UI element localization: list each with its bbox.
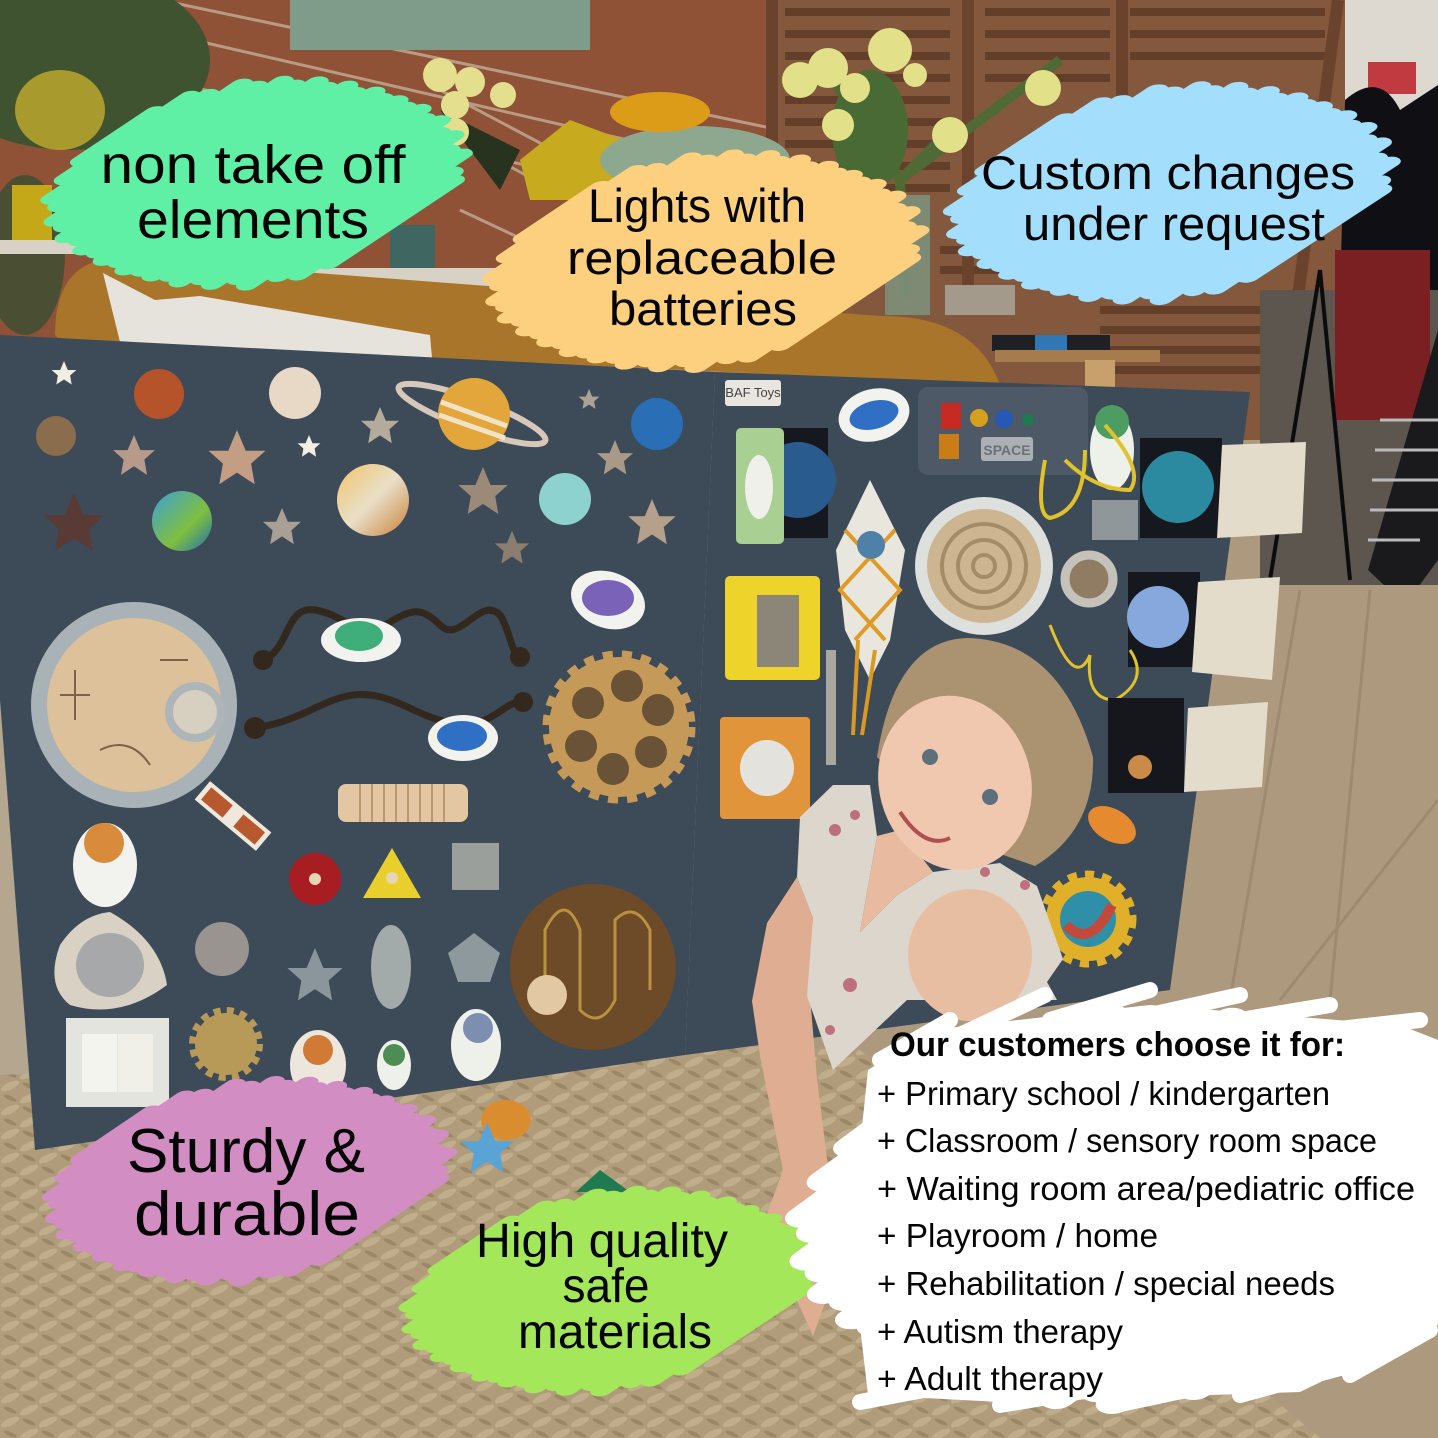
callout: lights with replaceable batteries: batteries <box>609 282 797 335</box>
callout: high quality safe materials <box>326 1127 888 1438</box>
right activity board <box>685 372 1306 1055</box>
brand tag: BAF Toys <box>725 385 781 400</box>
galaxy gear <box>1044 875 1132 963</box>
saturn door <box>1108 698 1268 793</box>
list items: + Primary school / kindergarten <box>877 1075 1330 1112</box>
light switch <box>66 1018 169 1107</box>
list heading: Our customers choose it for: <box>890 1026 1345 1064</box>
door with earth window <box>736 428 836 544</box>
neck and chest <box>860 830 933 932</box>
rocket lacing <box>836 480 905 735</box>
wavy cut slots <box>255 610 523 728</box>
list items: + Classroom / sensory room space <box>877 1122 1377 1159</box>
dress flowers <box>825 810 1030 1035</box>
orange door <box>720 717 810 819</box>
dress <box>797 785 1063 1070</box>
uranus door <box>1127 572 1280 680</box>
flowers on the wall <box>440 110 520 190</box>
callout: non take off elements: non take off <box>100 135 407 195</box>
sofa and pillow <box>55 258 1000 385</box>
callout: non take off elements: elements <box>137 190 369 250</box>
callout: lights with replaceable batteries: replaceable <box>567 231 837 284</box>
ufo stickers <box>321 561 653 761</box>
list items: + Rehabilitation / special needs <box>877 1265 1335 1302</box>
round alien wheel <box>31 602 237 808</box>
face <box>859 678 1051 888</box>
ufo sticker <box>832 381 916 449</box>
list items: + Adult therapy <box>877 1360 1104 1397</box>
callout: sturdy and durable <box>0 1017 522 1343</box>
astronaut stickers <box>290 1009 501 1100</box>
small gear <box>193 1011 259 1077</box>
push light and bell <box>54 912 249 1010</box>
flowers by the screen <box>820 60 1060 300</box>
gear <box>547 655 691 799</box>
translucent shapes <box>287 925 500 1009</box>
callout: lights with replaceable batteries <box>405 87 999 433</box>
list items: + Playroom / home <box>877 1217 1158 1254</box>
callout: lights with replaceable batteries: Lights with <box>588 179 806 232</box>
electric control panel: SPACE <box>983 442 1031 458</box>
stars <box>44 361 676 564</box>
callout: customer uses list <box>669 909 1438 1438</box>
yellow door <box>725 576 820 680</box>
wooden roller <box>338 784 468 822</box>
spiral wooden disc <box>510 884 676 1050</box>
electric control panel <box>918 387 1088 475</box>
list items: + Waiting room area/pediatric office <box>877 1170 1415 1207</box>
callout: high quality safe materials: materials <box>518 1306 712 1359</box>
yellow lacing <box>1041 425 1134 518</box>
wooden side table <box>995 350 1160 390</box>
loose pegs on the rug <box>460 1100 630 1192</box>
latch hinge <box>1092 500 1138 540</box>
callout: custom changes under request <box>865 18 1438 366</box>
jute rug <box>0 1045 1320 1438</box>
satellite <box>195 781 271 851</box>
left activity board <box>0 335 715 1150</box>
planets <box>36 367 683 551</box>
callout: non take off elements <box>0 15 540 349</box>
ball maze <box>915 497 1053 635</box>
plants top-left <box>0 0 210 150</box>
list items: + Autism therapy <box>877 1313 1123 1350</box>
round mirror <box>1065 555 1113 603</box>
astronaut cat <box>73 823 137 907</box>
callout: high quality safe materials: safe <box>562 1260 650 1313</box>
callout: high quality safe materials: High quality <box>476 1215 728 1268</box>
shoulder <box>908 889 1032 1021</box>
arm <box>752 877 840 1336</box>
callout: sturdy and durable: Sturdy & <box>127 1117 365 1186</box>
shape sorters <box>289 843 499 905</box>
frog astronaut sticker <box>1090 405 1134 490</box>
callout: sturdy and durable: durable <box>134 1180 360 1249</box>
callout: custom changes under request: under request <box>1023 197 1325 250</box>
hair <box>877 638 1093 866</box>
yellow cord and latch <box>1050 625 1137 700</box>
list items <box>877 1075 1415 1397</box>
chain lock <box>826 650 836 765</box>
neptune door <box>1140 438 1306 538</box>
comet sticker <box>1081 798 1143 852</box>
brand tag <box>725 380 781 406</box>
callout: custom changes under request: Custom changes <box>981 146 1355 199</box>
girl <box>752 638 1093 1336</box>
